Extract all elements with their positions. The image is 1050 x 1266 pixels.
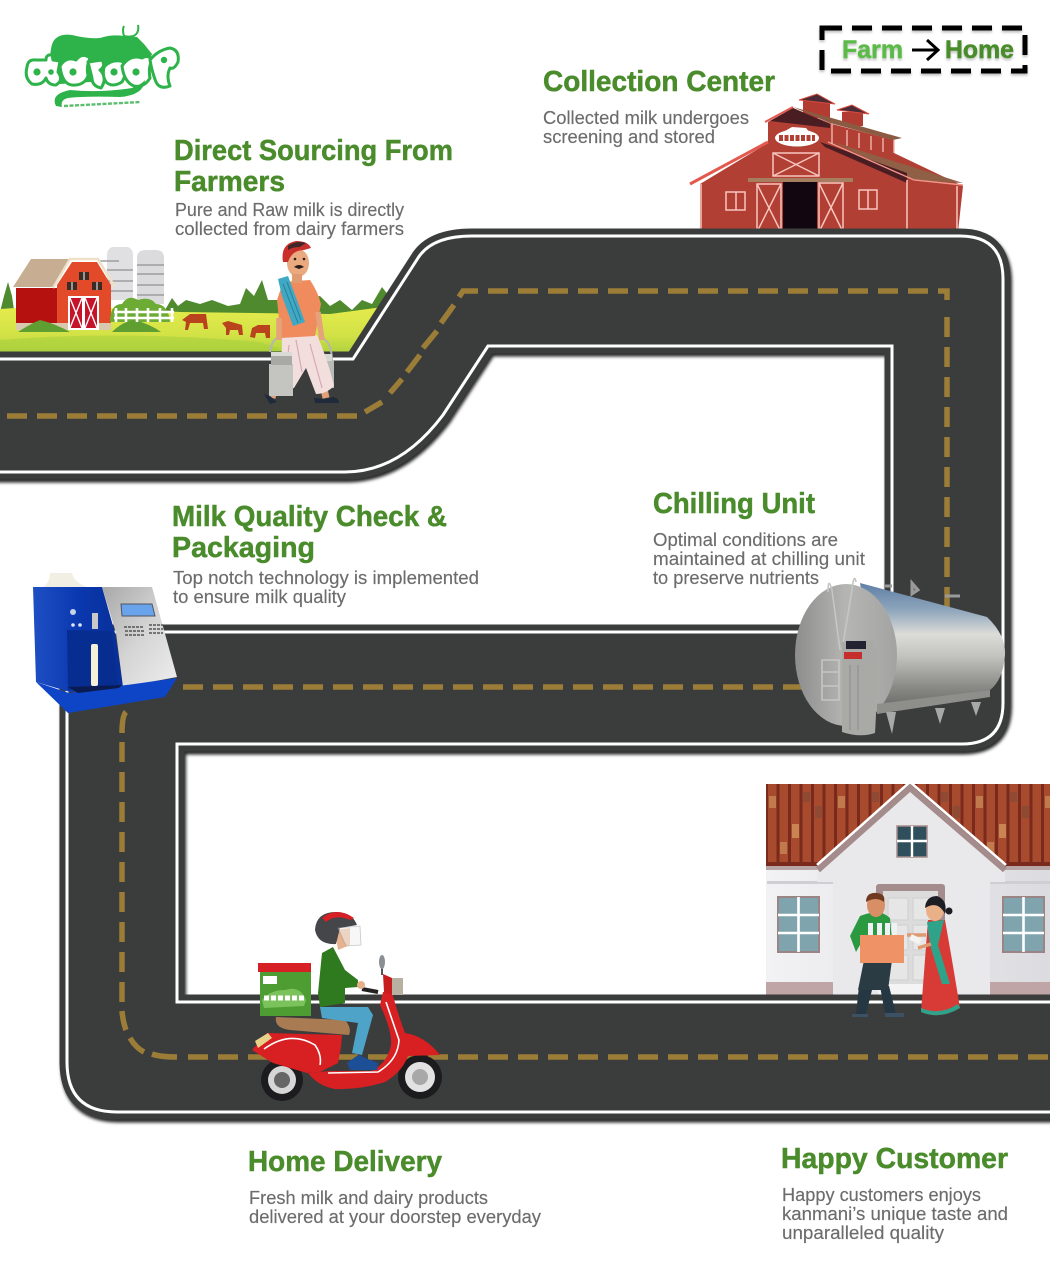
description: collected from dairy farmers bbox=[175, 219, 404, 239]
illustration: collection center barn bbox=[690, 94, 963, 232]
rider jeans bbox=[320, 1007, 373, 1055]
rider head and helmet bbox=[315, 912, 361, 950]
hopper bbox=[43, 573, 87, 587]
tiled roof bbox=[766, 784, 1050, 864]
legs bbox=[272, 380, 326, 398]
description bbox=[173, 568, 479, 607]
centre dashes bbox=[7, 291, 1050, 1057]
heading: Collection Center bbox=[543, 66, 775, 98]
tank fittings bbox=[885, 583, 960, 596]
description: screening and stored bbox=[543, 127, 715, 147]
description: Collected milk undergoes bbox=[543, 108, 749, 128]
description bbox=[782, 1185, 1008, 1243]
plinth bbox=[766, 982, 833, 996]
delivery man bbox=[850, 893, 904, 1017]
barn logo plate bbox=[775, 127, 819, 146]
dhoti bbox=[281, 335, 334, 394]
can handles bbox=[270, 338, 332, 362]
illustration: delivery scooter and rider bbox=[252, 912, 442, 1101]
right milk can bbox=[318, 354, 334, 388]
turban bbox=[283, 241, 311, 262]
badge: Farm to Home bbox=[822, 28, 1025, 71]
shirt bbox=[277, 280, 321, 338]
step: happy customer bbox=[781, 1143, 1008, 1243]
heading: Home Delivery bbox=[248, 1146, 442, 1178]
description: Pure and Raw milk is directly bbox=[175, 200, 404, 220]
headlight and handlebar bbox=[362, 955, 403, 995]
wheels bbox=[261, 1055, 442, 1101]
door bbox=[876, 884, 945, 984]
heading: Farmers bbox=[174, 166, 285, 198]
description: delivered at your doorstep everyday bbox=[249, 1207, 541, 1227]
sandals bbox=[264, 394, 277, 404]
dashed frame bbox=[822, 28, 1025, 71]
heading: Chilling Unit bbox=[653, 488, 815, 520]
description: Top notch technology is implemented bbox=[173, 568, 479, 588]
customer woman bbox=[907, 896, 960, 1015]
road bbox=[0, 236, 1050, 1112]
left milk can bbox=[269, 352, 293, 396]
silver side panel bbox=[102, 587, 177, 687]
description bbox=[543, 108, 749, 147]
cows bbox=[182, 314, 270, 338]
milk sample tube bbox=[91, 644, 98, 686]
milk crate bbox=[860, 935, 904, 963]
rear delivery box bbox=[258, 963, 311, 1016]
ladder bbox=[822, 578, 856, 700]
logo bbox=[26, 25, 178, 107]
step: collection center bbox=[543, 66, 775, 147]
description bbox=[653, 530, 865, 588]
field bbox=[0, 305, 390, 360]
blue front bbox=[33, 587, 123, 692]
step: direct sourcing from farmers bbox=[174, 135, 453, 239]
step: chilling unit bbox=[653, 488, 865, 588]
description bbox=[175, 200, 404, 239]
logo tagline mark bbox=[64, 102, 141, 106]
description: Happy customers enjoys bbox=[782, 1185, 981, 1205]
clerestory windows bbox=[832, 124, 894, 153]
barn body bbox=[700, 108, 963, 232]
description: to preserve nutrients bbox=[653, 568, 819, 588]
display bbox=[121, 604, 155, 616]
description: Fresh milk and dairy products bbox=[249, 1188, 488, 1208]
silos bbox=[100, 247, 164, 304]
tank end bbox=[795, 584, 897, 726]
scooter front shield and floor bbox=[308, 992, 440, 1089]
arms bbox=[279, 312, 322, 340]
barn doors bbox=[748, 178, 853, 232]
house centre gable bbox=[817, 788, 1005, 996]
towel bbox=[278, 276, 305, 326]
blue base bbox=[36, 678, 177, 713]
illustration: house bbox=[766, 782, 1050, 996]
farm barn bbox=[13, 259, 115, 330]
machine buttons bbox=[70, 609, 76, 615]
cupolas bbox=[799, 94, 869, 126]
heading bbox=[174, 135, 453, 198]
label: Farm: Farm bbox=[842, 36, 903, 64]
step: home delivery bbox=[248, 1146, 541, 1227]
head bbox=[287, 249, 309, 277]
arrow bbox=[912, 40, 938, 60]
heading: Milk Quality Check & bbox=[172, 501, 447, 533]
house wings bbox=[766, 866, 1050, 996]
description: to ensure milk quality bbox=[173, 587, 346, 607]
logo swoosh bbox=[55, 80, 145, 107]
seat bbox=[276, 1017, 350, 1035]
illustration: delivery man and customer bbox=[850, 893, 960, 1017]
bushes and fence bbox=[18, 298, 174, 332]
base frame bbox=[877, 690, 990, 714]
scooter rear body bbox=[252, 1033, 342, 1073]
windows bbox=[778, 826, 1044, 952]
control box bbox=[842, 640, 877, 735]
illustration: chilling tank bbox=[795, 578, 1005, 735]
moustache bbox=[294, 265, 304, 269]
tank cylinder bbox=[860, 583, 1005, 705]
illustration: farmer carrying milk cans bbox=[264, 241, 339, 404]
keypad bbox=[124, 625, 163, 635]
description: kanmani’s unique taste and bbox=[782, 1204, 1008, 1224]
step: milk quality check and packaging bbox=[172, 501, 479, 607]
label: Home: Home bbox=[945, 36, 1014, 64]
description bbox=[249, 1188, 541, 1227]
description: maintained at chilling unit bbox=[653, 549, 865, 569]
illustration: farm landscape bbox=[0, 247, 392, 360]
heading: Packaging bbox=[172, 532, 315, 564]
barn roof bbox=[793, 107, 902, 140]
heading bbox=[172, 501, 447, 564]
heading: Happy Customer bbox=[781, 1143, 1008, 1175]
recess bbox=[67, 630, 118, 690]
description: Optimal conditions are bbox=[653, 530, 838, 550]
rider jacket bbox=[318, 947, 358, 1007]
barn window bbox=[701, 153, 957, 232]
icon: cow silhouette bbox=[50, 25, 152, 84]
road surface bbox=[0, 236, 1050, 1112]
road edge line bbox=[0, 236, 1050, 1112]
illustration: milk analyser machine bbox=[33, 573, 177, 713]
logo lettering mark bbox=[26, 48, 178, 88]
control label bbox=[844, 652, 862, 659]
heading: Direct Sourcing From bbox=[174, 135, 453, 167]
tree line bbox=[0, 280, 392, 330]
description: unparalleled quality bbox=[782, 1223, 944, 1243]
tank legs bbox=[886, 702, 981, 734]
rider shoe bbox=[347, 1055, 378, 1070]
